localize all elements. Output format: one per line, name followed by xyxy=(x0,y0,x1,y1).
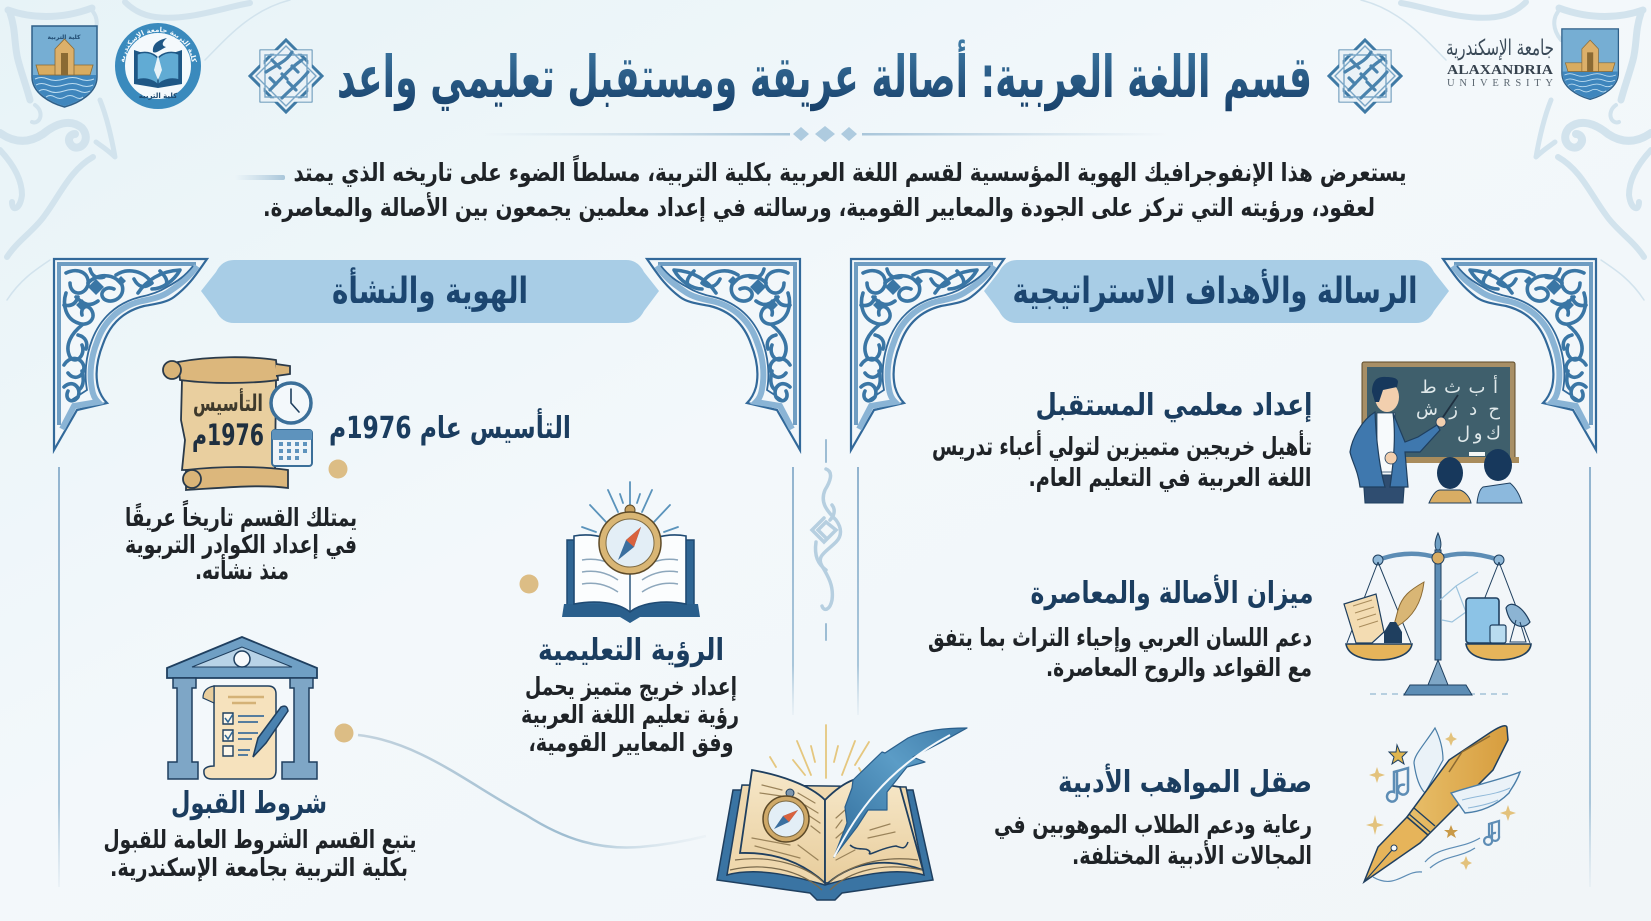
body text: vision: إعداد خريج متميز يحمل xyxy=(525,672,737,702)
body text: vision: وفق المعايير القومية، xyxy=(528,728,734,758)
body text: founding: منذ نشأته. xyxy=(195,554,289,585)
panel: mission and strategic goals xyxy=(851,259,1596,887)
heading: talent: صقل المواهب الأدبية xyxy=(1058,763,1312,800)
intro text: لعقود، ورؤيته التي تركز على الجودة والمعايير القومية، ورسالته في إعداد معلمين يجمعون بين الأصالة والمعاصرة. xyxy=(263,192,1375,223)
logo: Alexandria University wordmark: UNIVERSITY xyxy=(1447,78,1553,89)
gold dot marker xyxy=(520,574,538,594)
center divider ornament xyxy=(812,440,840,640)
icon: teacher at blackboard xyxy=(1350,362,1522,503)
ornament: calligraphic star left xyxy=(250,40,322,112)
heading: admission: شروط القبول xyxy=(171,786,327,821)
body text: admission xyxy=(104,825,416,883)
icon: scroll with clock and calendar: التأسيس xyxy=(193,387,263,417)
intro text xyxy=(235,155,1406,223)
body text: future teachers xyxy=(932,430,1312,493)
heading banner: mission: الرسالة والأهداف الاستراتيجية xyxy=(1012,268,1418,312)
icon: building with checklist and pen xyxy=(167,637,317,779)
icon: winged fountain pen xyxy=(1364,726,1520,882)
panel frame left xyxy=(54,259,800,887)
body text: vision xyxy=(521,672,739,758)
heading: founding: التأسيس عام 1976م xyxy=(329,408,571,446)
gold dot marker xyxy=(334,724,354,742)
logo: department emblem: كلية التربية xyxy=(139,92,178,100)
item: refining literary talent xyxy=(994,726,1520,882)
illustration: open book, compass and quill xyxy=(717,725,967,900)
corner arabesque: top right xyxy=(1361,0,1651,300)
body text: talent: المجالات الأدبية المختلفة. xyxy=(1072,840,1312,870)
heading banner: identity xyxy=(201,260,659,323)
body text: balance: مع القواعد والروح المعاصرة. xyxy=(1046,653,1312,683)
body text: future teachers: اللغة العربية في التعليم العام. xyxy=(1028,463,1312,493)
icon: scroll with clock and calendar xyxy=(163,357,312,490)
logo: department emblem: كلية التربية جامعة الإسكندرية xyxy=(120,26,198,62)
logo: faculty shield left: كلية التربية xyxy=(48,34,81,41)
body text: admission: يتبع القسم الشروط العامة للقبول xyxy=(104,825,416,855)
intro text: يستعرض هذا الإنفوجرافيك الهوية المؤسسية لقسم اللغة العربية بكلية التربية، مسلطاً الضوء على تاريخه الذي يمتد xyxy=(294,155,1406,188)
heading banner: mission xyxy=(984,260,1449,323)
icon: teacher at blackboard: أ ب ث ط xyxy=(1420,375,1498,398)
icon: teacher at blackboard: ح د ز ش xyxy=(1416,399,1500,420)
panel: identity and origins xyxy=(54,259,1596,900)
body text: admission: بكلية التربية بجامعة الإسكندرية. xyxy=(110,853,408,883)
heading banner: identity: الهوية والنشأة xyxy=(332,267,528,312)
ornament: calligraphic star right xyxy=(1329,40,1401,112)
logo: Alexandria University wordmark xyxy=(1446,36,1554,89)
body text: vision: رؤية تعليم اللغة العربية xyxy=(521,700,739,730)
logo: Alexandria University wordmark: ALAXANDRIA xyxy=(1447,63,1554,78)
item: balance of heritage and modernity xyxy=(928,533,1531,695)
connector curve to book xyxy=(358,735,706,848)
body text: talent xyxy=(994,810,1312,870)
logo: department emblem xyxy=(115,23,201,109)
heading: vision: الرؤية التعليمية xyxy=(538,633,724,668)
item: admission requirements xyxy=(104,637,706,883)
logo: university shield right xyxy=(1562,29,1618,99)
item: founding 1976 xyxy=(125,357,571,585)
body text: founding: يمتلك القسم تاريخاً عريقًا xyxy=(125,500,357,533)
item: educational vision xyxy=(520,482,739,758)
icon: scroll with clock and calendar: 1976م xyxy=(192,418,264,452)
gold dot marker xyxy=(328,460,348,478)
icon: compass on open book xyxy=(562,482,700,623)
panel frame right xyxy=(851,259,1596,887)
corner arabesque: top left xyxy=(0,0,290,300)
logo: Alexandria University wordmark: جامعة الإسكندرية xyxy=(1446,36,1554,61)
heading: balance: ميزان الأصالة والمعاصرة xyxy=(1030,574,1314,611)
body text: founding: في إعداد الكوادر التربوية xyxy=(125,530,357,560)
body text: talent: رعاية ودعم الطلاب الموهوبين في xyxy=(994,810,1312,840)
icon: teacher at blackboard: ك و ل xyxy=(1457,423,1501,444)
body text: future teachers: تأهيل خريجين متميزين لتولي أعباء تدريس xyxy=(932,430,1312,462)
heading: future teachers: إعداد معلمي المستقبل xyxy=(1036,388,1312,423)
logo: faculty shield left xyxy=(32,26,97,107)
title divider xyxy=(484,126,1168,142)
body text: founding xyxy=(125,500,357,585)
body text: balance xyxy=(928,623,1312,683)
body text: balance: دعم اللسان العربي وإحياء التراث بما يتفق xyxy=(928,623,1312,653)
item: preparing future teachers xyxy=(932,362,1522,503)
icon: scales with scroll and tablet xyxy=(1344,533,1531,695)
